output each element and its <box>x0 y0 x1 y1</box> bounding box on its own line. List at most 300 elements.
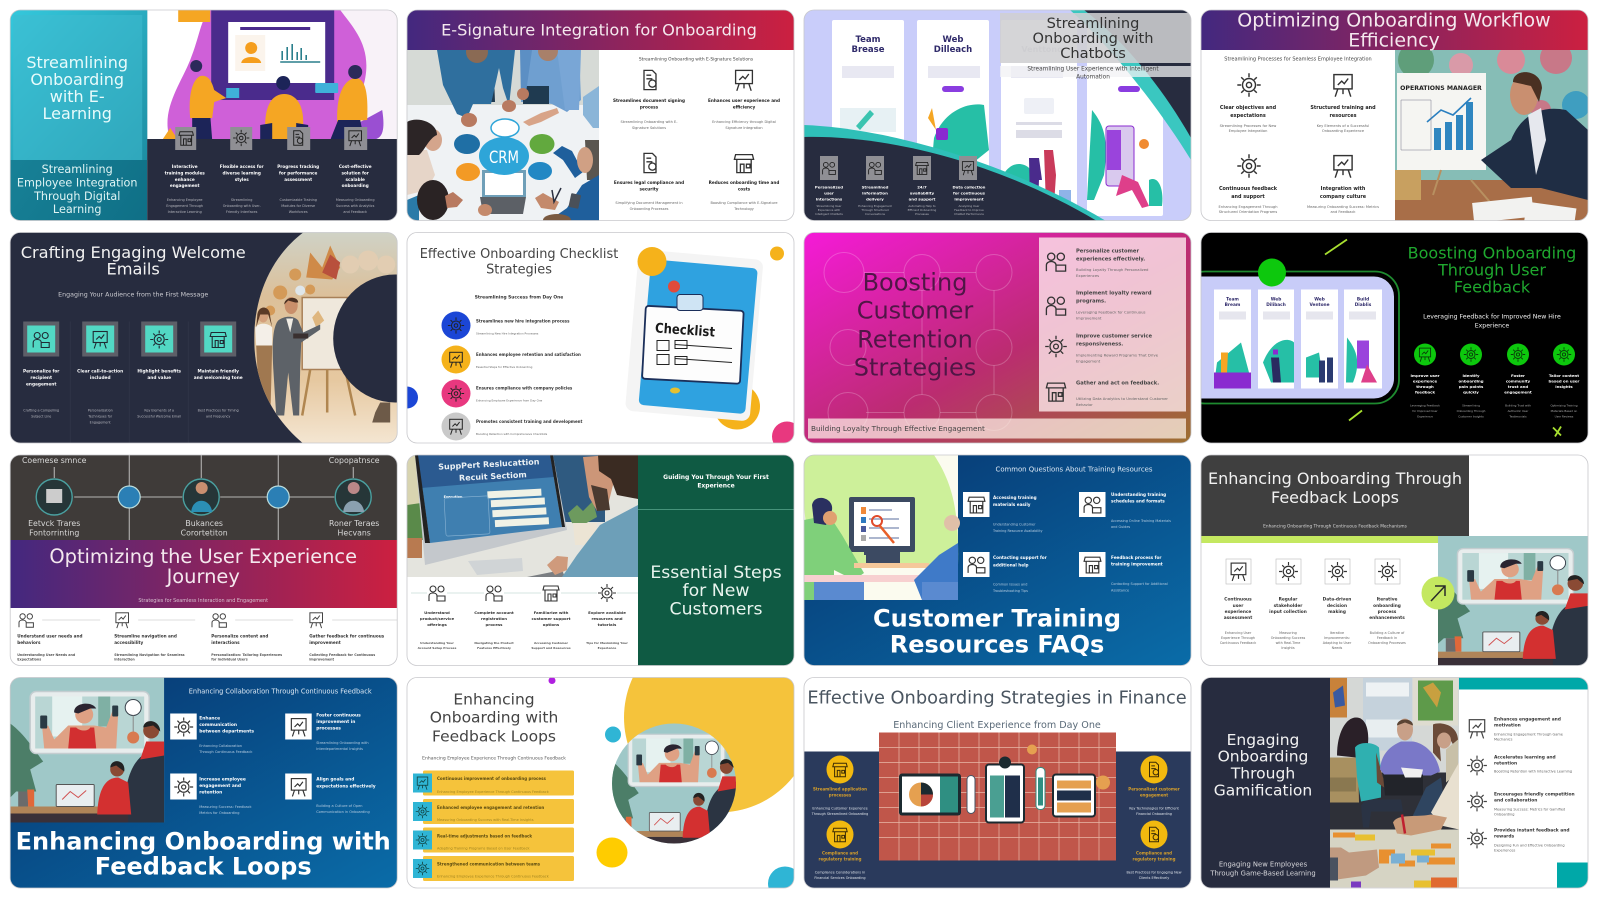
feature row: Iterative <box>1330 631 1344 635</box>
feature row: Best Practices for Timing <box>198 408 239 412</box>
illustration: phone screens: Build <box>1357 296 1369 302</box>
feature row: process <box>1378 609 1397 615</box>
panel: green title column: Essential Steps <box>650 563 782 583</box>
panel: four benefits: efficiency <box>733 104 755 110</box>
illustration: app screens: Brease <box>852 45 885 55</box>
illustration: people at presentation screen <box>147 10 383 140</box>
feature row: availability <box>910 190 935 196</box>
header block <box>1201 455 1469 543</box>
title: Through User <box>1437 260 1546 280</box>
benefit grid: improvement in <box>316 719 355 725</box>
side panel features: regulatory training <box>819 856 862 862</box>
header band <box>407 10 794 50</box>
feature row: Techniques for <box>87 414 113 418</box>
feature row: Crafting a Compelling <box>23 408 59 412</box>
illustration: app screens: Venttono <box>1021 45 1063 54</box>
feature row: Feedback to Improve <box>954 208 984 212</box>
photo: network diagram on dark wall: Bukances <box>185 519 223 528</box>
panel: four benefits: Enhances user experience and <box>708 98 780 103</box>
benefit grid: expectations effectively <box>316 784 376 790</box>
feature row: through <box>1416 384 1434 389</box>
right panel: Experiences <box>1076 273 1099 278</box>
slide: Boosting Customer Retention Strategies <box>804 232 1191 443</box>
FAQ grid: Understanding training <box>1111 492 1166 497</box>
FAQ grid: Feedback process for <box>1111 555 1162 560</box>
feature row: user <box>1233 603 1244 609</box>
panel: dark feature band: Enhancing Employee <box>167 198 203 202</box>
title <box>854 268 976 382</box>
list bars: Adapting Training Programs Based on User Feedback <box>437 846 531 850</box>
FAQ grid: Accessing training <box>993 495 1037 500</box>
feature row: Enhancing Engagement <box>858 204 893 208</box>
title: Resources FAQs <box>890 630 1104 658</box>
panel: dark feature band: Customizable Training <box>279 198 317 202</box>
panel: benefits: Encourages friendly competition <box>1494 792 1575 798</box>
feature row: Personalization: Tailoring Experiences <box>211 653 282 657</box>
photo: network diagram on dark wall: Fontorrinting <box>29 528 79 538</box>
right panel: experiences effectively. <box>1076 256 1145 262</box>
right panel: Engagement <box>1076 358 1101 364</box>
benefit grid: processes <box>316 726 341 732</box>
panel: dark feature band: enhance <box>175 177 195 182</box>
illustration: people at monitor <box>804 455 960 600</box>
benefit grid: Increase employee <box>199 776 246 782</box>
panel: dark feature band: Modules for Diverse <box>281 204 315 208</box>
feature row: Expectations <box>17 658 41 662</box>
feature row: insights <box>1555 384 1573 389</box>
feature row: Needs <box>1332 646 1343 650</box>
feature row: 24/7 <box>917 184 927 190</box>
feature row: offerings <box>427 622 447 627</box>
illustration: phone screens: Diablis <box>1355 302 1372 308</box>
panel: benefits: rewards <box>1494 834 1514 840</box>
photo: operations manager: OPERATIONS MANAGER <box>1400 85 1482 92</box>
list bars: Enhancing Employee Experience Through Continuous Feedback <box>437 874 550 878</box>
feature row: Identify <box>1462 373 1480 378</box>
feature row: making <box>1328 609 1346 615</box>
feature row: Personalize content and <box>211 634 268 638</box>
panel: four elements: Continuous feedback <box>1219 186 1278 192</box>
feature row: Testimonials <box>1508 414 1527 418</box>
benefit grid: Interdepartmental Insights <box>316 747 363 751</box>
panel: four benefits <box>613 56 780 211</box>
title <box>26 53 128 123</box>
photo: customer at support screen: SuppPert Reslucattion <box>438 457 540 472</box>
panel: four benefits: security <box>639 186 659 192</box>
benefit grid: engagement and <box>199 783 241 789</box>
illustration: checklist clipboard: Checklist <box>655 320 716 341</box>
arrow badge <box>1422 576 1454 610</box>
benefit grid: Communication in Onboarding <box>316 810 370 814</box>
feature row: Iterative <box>1377 596 1397 602</box>
subtitle <box>17 163 138 216</box>
feature row <box>411 581 638 650</box>
FAQ grid: Common Issues and <box>993 582 1027 586</box>
FAQ grid: and Guides <box>1111 525 1130 529</box>
feature row: Automating Help to <box>908 204 936 208</box>
panel: dark title column: Through Game-Based Learning <box>1209 870 1316 878</box>
slide: Optimizing the User Experience Journey <box>10 455 397 666</box>
feature row: Regular <box>1279 596 1298 602</box>
subtitle: Enhancing Client Experience from Day One <box>893 720 1101 731</box>
header band: Strategies for Seamless Interaction and Engagement <box>138 598 268 604</box>
header block: Feedback Loops <box>1271 488 1399 507</box>
title: Boosting <box>863 268 967 296</box>
side panel features: Clients Effectively <box>1139 876 1169 880</box>
feature row: Improvements: <box>1324 636 1350 640</box>
feature row: Understand <box>424 610 450 615</box>
side panel features: Financial Onboarding <box>1136 812 1172 816</box>
feature row: Maintain friendly <box>197 368 239 374</box>
panel: four elements: Enhancing Engagement Through <box>1219 205 1277 209</box>
feature row: with Real-Time <box>1276 641 1300 645</box>
feature row: Navigating the Product <box>474 641 514 645</box>
header band: Optimizing the User Experience <box>49 545 357 568</box>
feature row: Streamlining Navigation for Seamless <box>114 653 185 657</box>
feature row: interactions <box>211 640 240 645</box>
feature row: stakeholder <box>1274 603 1303 609</box>
panel: benefits: and collaboration <box>1494 798 1537 804</box>
benefit grid: Measuring Success: Feedback <box>199 805 253 809</box>
title: Customer <box>857 296 973 324</box>
side panel features: Through Streamlined Onboarding <box>811 812 868 816</box>
photo: network diagram on dark wall: Hecvans <box>338 528 371 538</box>
subtitle: Streamlining Success from Day One <box>475 294 563 300</box>
title: Emails <box>107 260 160 278</box>
header band: Journey <box>166 565 240 588</box>
feature row: Personalization <box>88 408 113 412</box>
feature row: onboarding <box>1373 603 1401 609</box>
feature row: input collection <box>1269 609 1307 615</box>
panel: dark title column: Engaging <box>1227 731 1299 749</box>
slide: Enhancing Onboarding with Feedback Loops (blue) <box>10 678 397 888</box>
FAQ grid: materials easily <box>993 502 1031 507</box>
FAQ grid: Contacting Support for Additional <box>1111 582 1168 586</box>
benefit grid: retention <box>199 790 222 796</box>
benefit grid: Through Continuous Feedback <box>198 750 253 754</box>
photo: mirror video call <box>10 678 164 822</box>
title: Boosting Onboarding <box>1408 244 1576 262</box>
list bars: Real-time adjustments based on feedback <box>437 834 532 838</box>
feature row: Personalize for <box>23 368 60 374</box>
feature row: User Reviews <box>1555 414 1574 418</box>
illustration: checklist clipboard <box>625 247 764 421</box>
feature row: Features Effectively <box>477 646 511 650</box>
title: Streamlining <box>26 53 128 72</box>
feature row: experience <box>1413 378 1437 384</box>
title <box>430 690 558 746</box>
title box: Automation <box>1076 74 1110 80</box>
subtitle band: Building Loyalty Through Effective Engagement <box>811 424 985 433</box>
title: Effective Onboarding Checklist <box>420 247 618 262</box>
feature row: decision <box>1327 603 1347 609</box>
subtitle: Enhancing Collaboration Through Continuous Feedback <box>189 688 372 696</box>
feature row: Onboarding Through <box>1457 409 1486 413</box>
feature row: onboarding <box>1458 378 1484 384</box>
list bars: Enhanced employee engagement and retention <box>437 805 544 810</box>
slide: Essential Steps for New Customers <box>407 455 794 666</box>
feature row: Account Setup Process <box>418 646 457 650</box>
feature row: for Improved User <box>1412 409 1438 413</box>
photo: team around CRM table <box>407 41 599 226</box>
feature row: Measuring <box>1279 631 1297 635</box>
panel: dark feature band: scalable <box>346 177 365 182</box>
panel: green title column: for New <box>683 581 749 601</box>
feature row: Streamline navigation and <box>114 634 177 638</box>
feature row: pain points <box>1459 384 1484 389</box>
feature row: recipient <box>30 375 52 381</box>
title box: Streamlining <box>1047 15 1139 32</box>
panel: four elements: Measuring Onboarding Success: Metrics <box>1307 205 1379 209</box>
panel: four elements: Onboarding Experience <box>1322 129 1365 133</box>
feature row: Efficient Onboarding <box>908 208 937 212</box>
panel: dark feature band: Interactive Learning <box>168 210 202 214</box>
right panel: Improve customer service <box>1076 334 1152 340</box>
right panel: programs. <box>1076 298 1106 304</box>
slide: Streamlining Onboarding with Chatbots <box>804 10 1191 221</box>
feature row <box>1410 344 1580 418</box>
photo: team playing board game <box>1330 678 1459 888</box>
feature row: community <box>1506 378 1531 384</box>
FAQ grid: Contacting support for <box>993 555 1048 560</box>
panel: four benefits: Onboarding Processes <box>630 207 669 211</box>
panel: four benefits: Signature Solutions <box>632 126 666 130</box>
feature row: interactions <box>816 196 843 202</box>
panel: benefits: motivation <box>1494 722 1521 728</box>
side panel features: Compliance and <box>1136 850 1172 856</box>
title: with E- <box>50 87 105 106</box>
feature row: Clear call-to-action <box>77 368 123 374</box>
feature row: Engagement <box>90 420 111 424</box>
panel: dark feature band: Onboarding with User- <box>223 204 261 208</box>
panel: green title column: Guiding You Through Your First <box>663 474 769 481</box>
list bars <box>413 770 574 881</box>
feature row: Leveraging Feedback <box>1410 404 1440 408</box>
panel: left teal title block <box>10 10 147 220</box>
right panel: Gather and act on feedback. <box>1076 380 1159 386</box>
panel: green title column: Experience <box>697 482 735 490</box>
FAQ grid: Accessing Online Training Materials <box>1111 519 1171 523</box>
panel: four elements: Clear objectives and <box>1220 105 1277 111</box>
title <box>873 604 1121 658</box>
feature row: resources and <box>591 616 623 621</box>
panel: four elements: expectations <box>1230 113 1266 119</box>
slide: Crafting Engaging Welcome Emails <box>10 232 398 444</box>
title: Effective Onboarding Strategies in Finance <box>807 688 1187 708</box>
feature row: Authentic User <box>1508 409 1529 413</box>
benefit grid: Enhancing Collaboration <box>199 744 242 748</box>
list: Promotes consistent training and development <box>476 419 583 424</box>
photo: operations manager <box>1395 42 1590 228</box>
feature row: user <box>824 190 834 196</box>
panel: dark title column: Gamification <box>1214 782 1312 800</box>
panel: dark feature band: for performance <box>279 170 318 176</box>
header band: E-Signature Integration for Onboarding <box>441 20 757 40</box>
title <box>420 247 618 278</box>
decorative sparks <box>1325 240 1561 436</box>
subtitle: Employee Integration <box>17 176 138 190</box>
panel: benefits: Measuring Success: Metrics for Gamified <box>1494 808 1565 812</box>
feature row: enhancements <box>1369 615 1405 621</box>
feature row: Onboarding Processes <box>1368 641 1406 645</box>
header band: Efficiency <box>1348 30 1440 52</box>
list: Enhancing Employee Experience from Day One <box>476 398 543 402</box>
title: Enhancing <box>453 690 535 708</box>
subtitle: Enhancing Employee Experience Through Continuous Feedback <box>422 756 566 762</box>
side panel features: processes <box>829 792 852 798</box>
feature row: Adapting to User <box>1323 641 1352 645</box>
title box: Chatbots <box>1060 45 1126 62</box>
list bars: Continuous improvement of onboarding process <box>437 776 547 781</box>
panel: benefits <box>1459 678 1588 888</box>
list: Streamlining New Hire Integration Processes <box>476 332 539 336</box>
panel: benefits: Mechanics <box>1494 738 1513 742</box>
slide: Enhancing Onboarding with Feedback Loops (yellow) <box>407 622 814 900</box>
subtitle: Through Digital <box>33 190 120 203</box>
side panel features: Financial Services Onboarding <box>814 876 866 880</box>
FAQ grid: training improvement <box>1111 562 1163 566</box>
right panel: Improvement <box>1076 316 1102 320</box>
list: Enhances employee retention and satisfaction <box>476 352 581 357</box>
title: Strategies <box>854 354 976 382</box>
panel: four elements: and support <box>1231 194 1265 200</box>
panel: four benefits: process <box>640 104 659 110</box>
slide: Customer Training Resources FAQs <box>804 455 1191 666</box>
panel: dark feature band <box>147 127 397 221</box>
panel: dark title column <box>1201 678 1330 888</box>
feature row: Tips for Maximizing Your <box>586 641 628 645</box>
panel: benefits: Enhancing Engagement Through Game <box>1494 732 1563 736</box>
feature row: Interaction <box>114 658 135 662</box>
benefit grid: Enhance <box>199 716 220 722</box>
FAQ grid: additional help <box>993 562 1029 568</box>
panel: dark feature band: assessment <box>284 177 312 182</box>
title: Onboarding with <box>430 708 558 726</box>
right panel: responsiveness. <box>1076 342 1123 348</box>
panel: benefits: Enhances engagement and <box>1494 716 1561 722</box>
panel: four benefits: Streamlines document signing <box>613 98 685 103</box>
feature row: and Frequency <box>206 414 230 418</box>
feature row: Streamlining User <box>816 204 842 208</box>
feature row: Understanding Your <box>420 641 454 645</box>
right panel: Leveraging Feedback for Continuous <box>1076 310 1146 314</box>
feature row: process <box>486 622 503 627</box>
feature row: options <box>543 622 560 627</box>
feature row: Customer Insights <box>1458 414 1484 418</box>
panel: four benefits: Technology <box>733 207 754 211</box>
illustration: phone screens: Web <box>1271 296 1281 302</box>
feature row: and value <box>147 375 171 381</box>
feature row: Insights <box>1281 646 1295 650</box>
panel: four elements: resources <box>1329 113 1357 119</box>
FAQ grid: Training Resource Availability <box>992 529 1043 533</box>
feature row: behaviors <box>17 640 41 645</box>
decorative dark circle <box>333 274 397 402</box>
panel: four benefits: Streamlining Onboarding with E- <box>621 120 678 124</box>
illustration: app screens <box>832 20 1163 216</box>
slide: Optimizing Onboarding Workflow Efficiency <box>1201 10 1590 228</box>
feature row: Data-driven <box>1323 596 1351 602</box>
panel: four benefits: Boosting Compliance with E-Signature <box>710 201 778 205</box>
feature row: information <box>862 190 888 196</box>
feature row: Conversations <box>865 212 886 216</box>
slide: E-Signature Integration <box>407 10 794 226</box>
feature row: customer support <box>532 616 571 621</box>
title: Feedback <box>1454 278 1531 296</box>
feature row <box>1220 559 1406 650</box>
photo: customer at support screen <box>407 455 638 577</box>
side panel features: Key Technologies for Efficient <box>1129 806 1179 810</box>
panel: dark feature band: training modules <box>165 170 205 176</box>
panel: benefits: Accelerates learning and <box>1494 754 1556 760</box>
photo: network diagram on dark wall: Corortetiton <box>181 528 228 538</box>
panel: four benefits: Enhancing Efficiency through Digital <box>712 120 776 124</box>
feature row: Continuous <box>1224 596 1252 602</box>
photo: network diagram on dark wall: Coemese smnce <box>22 456 87 465</box>
feature row: Subject Line <box>31 414 51 418</box>
photo: presenter with easel <box>250 232 400 444</box>
feature row: quickly <box>1463 390 1479 394</box>
feature row: based on user <box>1549 378 1580 384</box>
panel: four benefits: Reduces onboarding time and <box>709 180 779 185</box>
photo: network diagram on dark wall <box>10 455 397 541</box>
photo: customer at support screen: Recuit Sectiom <box>459 470 527 483</box>
title <box>22 246 245 274</box>
panel: dark feature band: Success with Analytics <box>336 204 375 208</box>
slide: Effective Onboarding Checklist Strategies <box>396 232 802 452</box>
feature row: Explore available <box>588 610 626 615</box>
list: Streamlines new hire integration process <box>476 318 570 324</box>
illustration: phone screens <box>1181 258 1399 404</box>
illustration: phone screens: Team <box>1226 296 1239 302</box>
feature row: Data collection <box>953 184 986 190</box>
feature row: for continuous <box>953 190 986 196</box>
panel: dark feature band: and Feedback <box>343 210 367 214</box>
panel: green title column: Customers <box>670 600 762 620</box>
FAQ grid <box>963 492 1171 593</box>
panel: four elements: Employee Integration <box>1229 129 1267 133</box>
subtitle: Streamlining <box>42 163 113 176</box>
feature row <box>17 613 397 662</box>
feature row: Support and Resources <box>531 646 571 650</box>
panel: dark feature band: Streamlining <box>231 198 252 202</box>
panel: four elements: Streamlining Processes for New <box>1220 124 1276 128</box>
list bars: Strengthened communication between teams <box>437 862 541 866</box>
title: Strategies <box>486 262 552 278</box>
header block: Enhancing Onboarding Through Continuous Feedback Mechanisms <box>1263 524 1408 530</box>
side panel features: engagement <box>1140 792 1168 798</box>
feature row <box>23 322 243 444</box>
feature row: Improve user <box>1410 373 1440 378</box>
slide: Enhancing Onboarding Through Feedback Loops <box>1201 455 1588 666</box>
header band <box>1201 10 1588 52</box>
feature row: Processes <box>915 212 929 216</box>
feature row: Building Trust with <box>1505 404 1531 408</box>
feature row: Intelligent Chatbots <box>815 212 843 216</box>
feature row: accessibility <box>114 640 144 645</box>
feature row: Streamlined <box>862 184 889 190</box>
feature row: Accessing Customer <box>534 641 569 645</box>
title: Learning <box>42 104 112 123</box>
side panel features: Best Practices for Engaging New <box>1126 870 1182 874</box>
benefit grid <box>170 712 376 815</box>
subtitle: Leveraging Feedback for Improved New Hire <box>1423 314 1561 320</box>
feature row: Understanding User Needs and <box>17 653 76 657</box>
FAQ grid: Troubleshooting Tips <box>992 589 1028 593</box>
illustration: phone screens: Web <box>1314 296 1325 302</box>
header band: Optimizing Onboarding Workflow <box>1237 10 1551 32</box>
illustration: phone screens: Ventone <box>1309 302 1330 308</box>
